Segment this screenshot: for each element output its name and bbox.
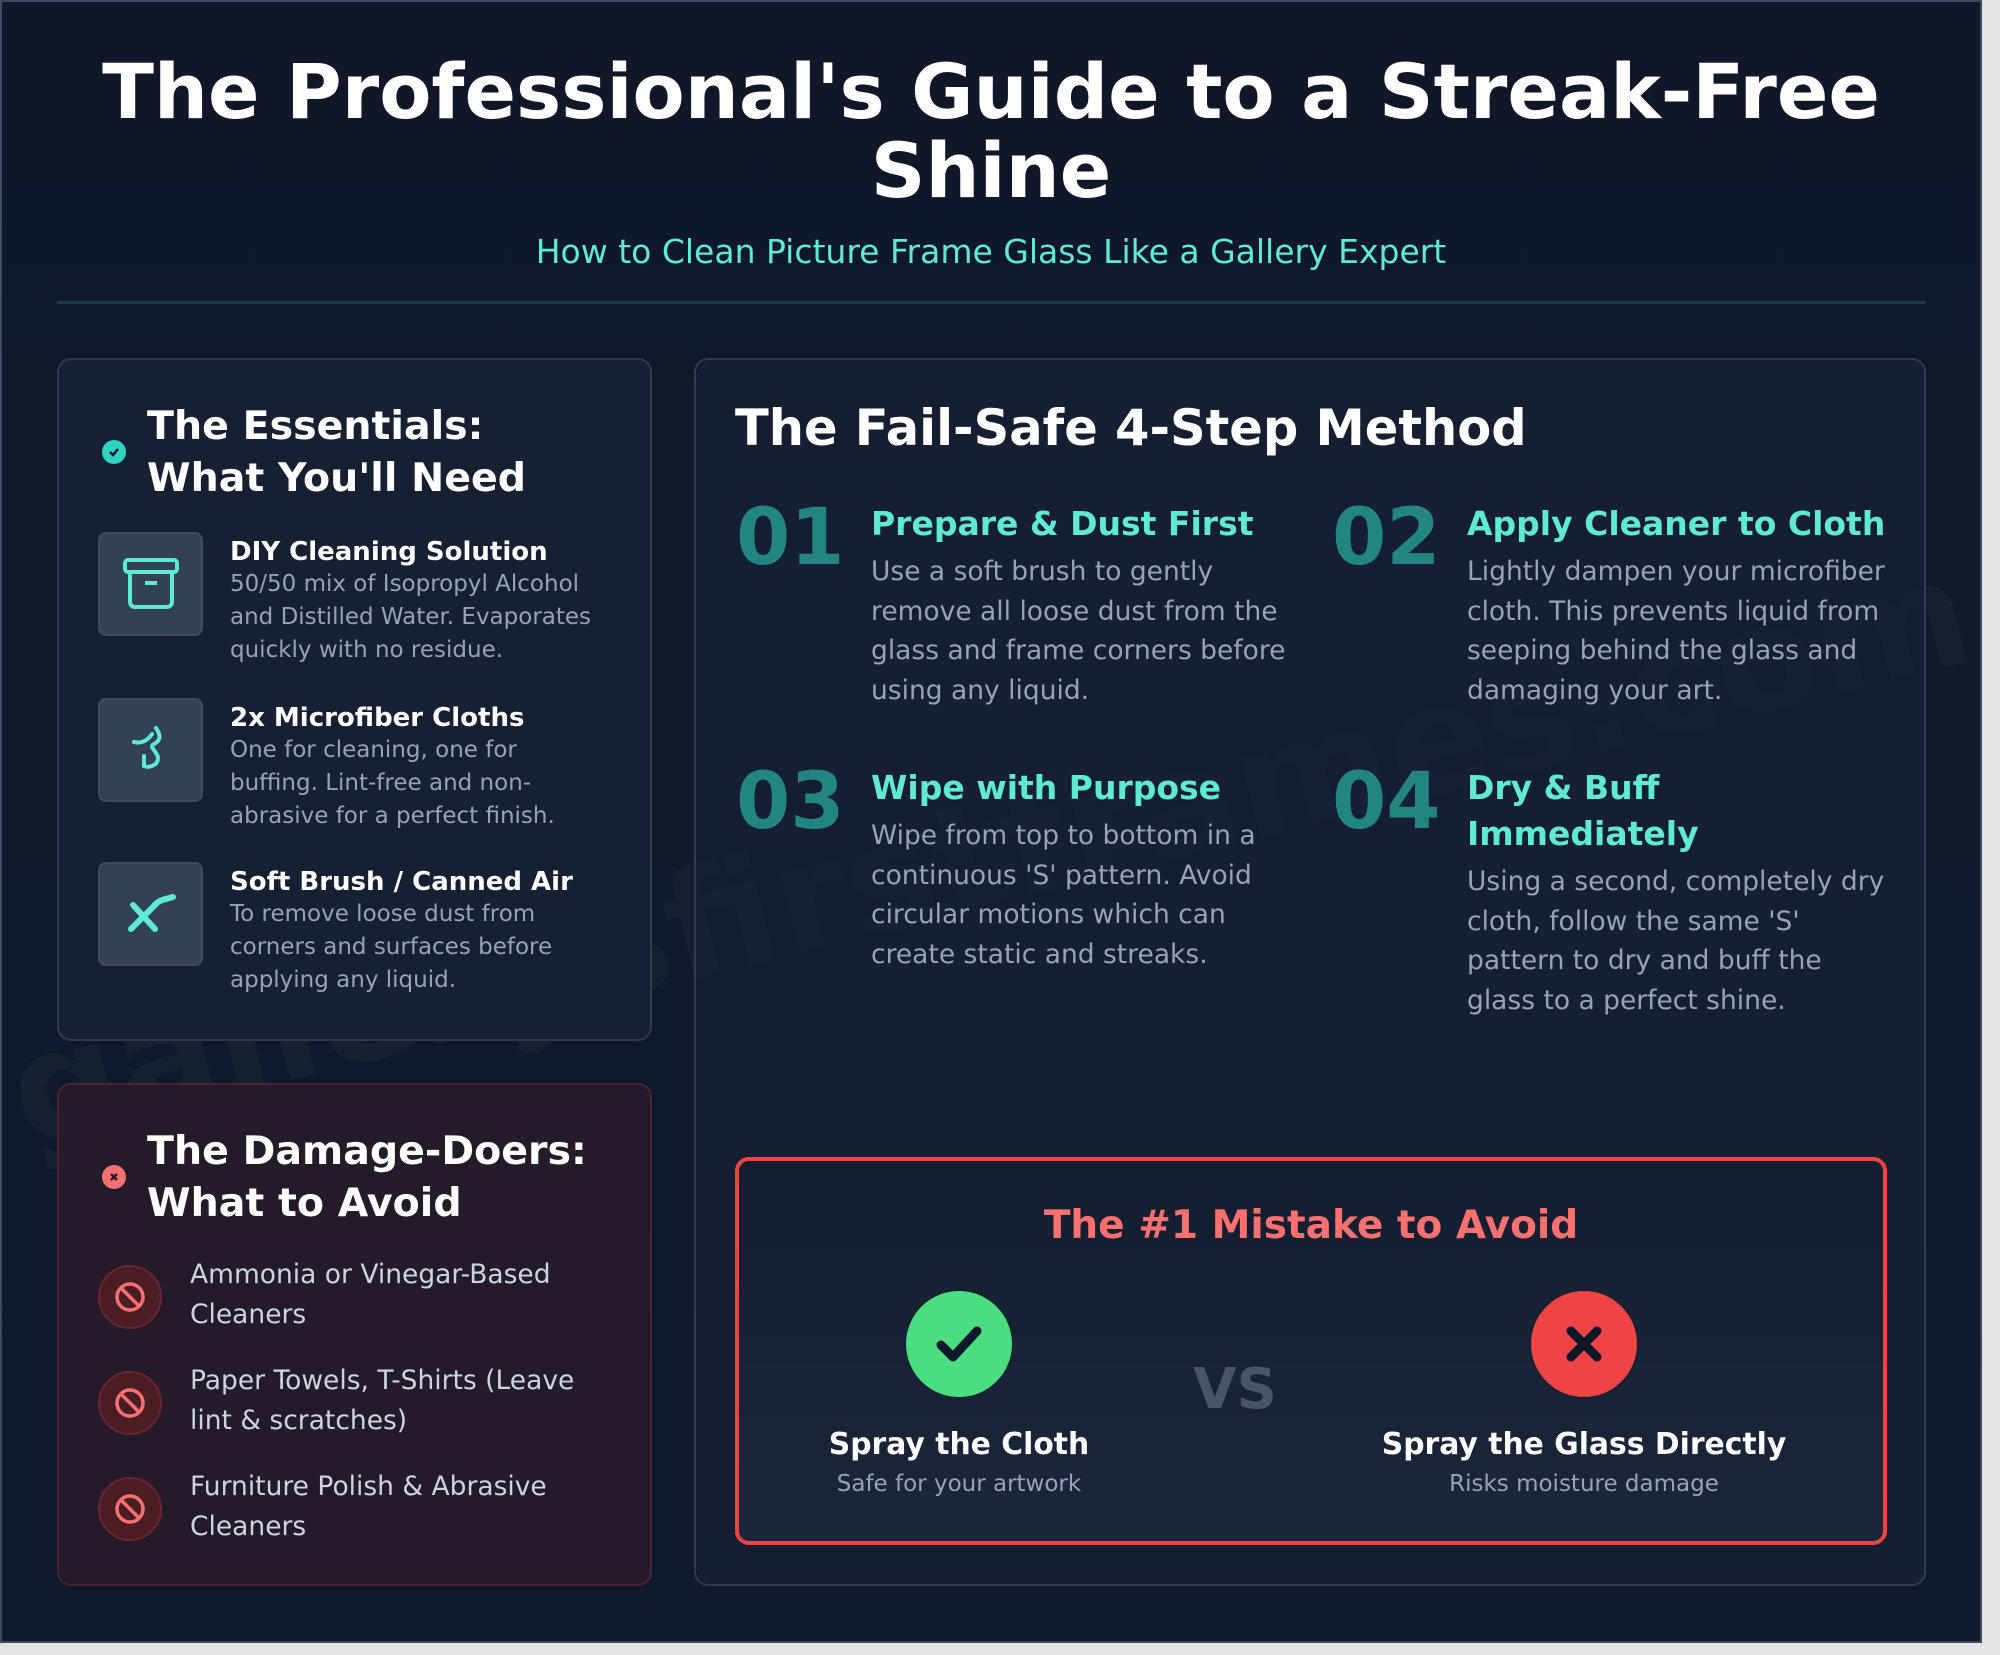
step 02: damaging your art. [1467,674,1722,706]
avoid item 2: lint & scratches) [190,1405,407,1436]
do: spray cloth: Spray the Cloth [829,1427,1089,1462]
avoid item 3: Furniture Polish & Abrasive [190,1471,547,1502]
step 03: Wipe from top to bottom in a [871,820,1256,851]
icon: brush [98,862,203,966]
title: The Professional's Guide to a Streak-Free [102,47,1880,136]
step 04: Dry & Buff [1467,768,1659,807]
step 04: Immediately [1467,814,1699,853]
callout: #1 mistake [735,1157,1887,1545]
dont: spray glass: Spray the Glass Directly [1382,1427,1786,1462]
avoid item 1: Cleaners [190,1299,306,1330]
step 04 [1332,757,1884,1016]
step 02: 02 [1332,493,1441,583]
panel: 4-step method [694,358,1926,1586]
heading: damage: What to Avoid [147,1180,462,1226]
icon: check [102,440,126,464]
panel: essentials [57,358,652,1041]
do: spray cloth [829,1291,1089,1497]
heading: method: The Fail-Safe 4-Step Method [735,399,1527,457]
item: microfiber [98,698,555,829]
item: DIY solution: DIY Cleaning Solution [230,537,548,567]
item: brush [98,862,573,993]
step 04: pattern to dry and buff the [1467,945,1822,976]
step 01: glass and frame corners before [871,635,1285,666]
avoid item 3: Cleaners [190,1511,306,1542]
avoid item 1: Ammonia or Vinegar-Based [190,1259,551,1290]
dont: spray glass: Risks moisture damage [1449,1471,1719,1497]
title: Shine [871,126,1111,215]
step 03: continuous 'S' pattern. Avoid [871,860,1252,890]
heading: essentials: What You'll Need [147,455,526,501]
item: DIY solution [98,532,591,663]
step 02: Apply Cleaner to Cloth [1467,504,1885,543]
avoid item 2 [98,1365,574,1436]
step 01: 01 [736,493,845,583]
avoid item 1 [98,1259,551,1330]
step 01 [736,493,1285,706]
step 03: 03 [736,757,845,847]
heading: damage [147,1128,587,1226]
step 03: create static and streaks. [871,938,1208,970]
icon: bucket [98,532,203,636]
item: brush: applying any liquid. [230,967,456,993]
step 02: seeping behind the glass and [1467,635,1857,666]
step 02: cloth. This prevents liquid from [1467,596,1879,626]
avoid item 2: Paper Towels, T-Shirts (Leave [190,1365,574,1396]
do: spray cloth: Safe for your artwork [837,1471,1081,1497]
item: DIY solution: and Distilled Water. Evaporates [230,604,591,630]
step 03: Wipe with Purpose [871,768,1221,807]
dont: spray glass [1382,1291,1786,1497]
item: brush: corners and surfaces before [230,934,552,960]
step 04: glass to a perfect shine. [1467,984,1786,1016]
heading: damage: The Damage-Doers: [147,1128,587,1174]
item: microfiber: buffing. Lint-free and non- [230,770,531,796]
title [102,47,1880,215]
icon: x [102,1165,126,1189]
step 01: remove all loose dust from the [871,596,1278,626]
item: microfiber: 2x Microfiber Cloths [230,703,524,733]
item: brush: Soft Brush / Canned Air [230,867,573,897]
watermark: gallerysfirstframes.com [0,525,1982,1181]
avoid item 3 [98,1471,547,1542]
step 04: Using a second, completely dry [1467,866,1884,897]
step 01: Use a soft brush to gently [871,556,1213,587]
step 01: Prepare & Dust First [871,504,1253,543]
item: brush: To remove loose dust from [230,901,535,927]
item: DIY solution: quickly with no residue. [230,637,503,663]
subtitle: How to Clean Picture Frame Glass Like a Gallery Expert [536,232,1446,271]
heading: essentials [147,403,526,501]
item: microfiber: One for cleaning, one for [230,737,517,763]
item: DIY solution: 50/50 mix of Isopropyl Alcohol [230,571,579,597]
panel: damage-doers [57,1083,652,1586]
step 04: 04 [1332,757,1441,847]
icon: cloth [98,698,203,802]
step 02 [1332,493,1885,706]
step 02: Lightly dampen your microfiber [1467,556,1885,587]
item: microfiber: abrasive for a perfect finish. [230,803,555,829]
heading: essentials: The Essentials: [147,403,483,449]
vs: VS [1193,1357,1277,1422]
callout heading: The #1 Mistake to Avoid [1044,1203,1578,1248]
step 01: using any liquid. [871,674,1089,706]
step 03 [736,757,1256,970]
step 03: circular motions which can [871,899,1226,930]
step 04: cloth, follow the same 'S' [1467,906,1800,936]
